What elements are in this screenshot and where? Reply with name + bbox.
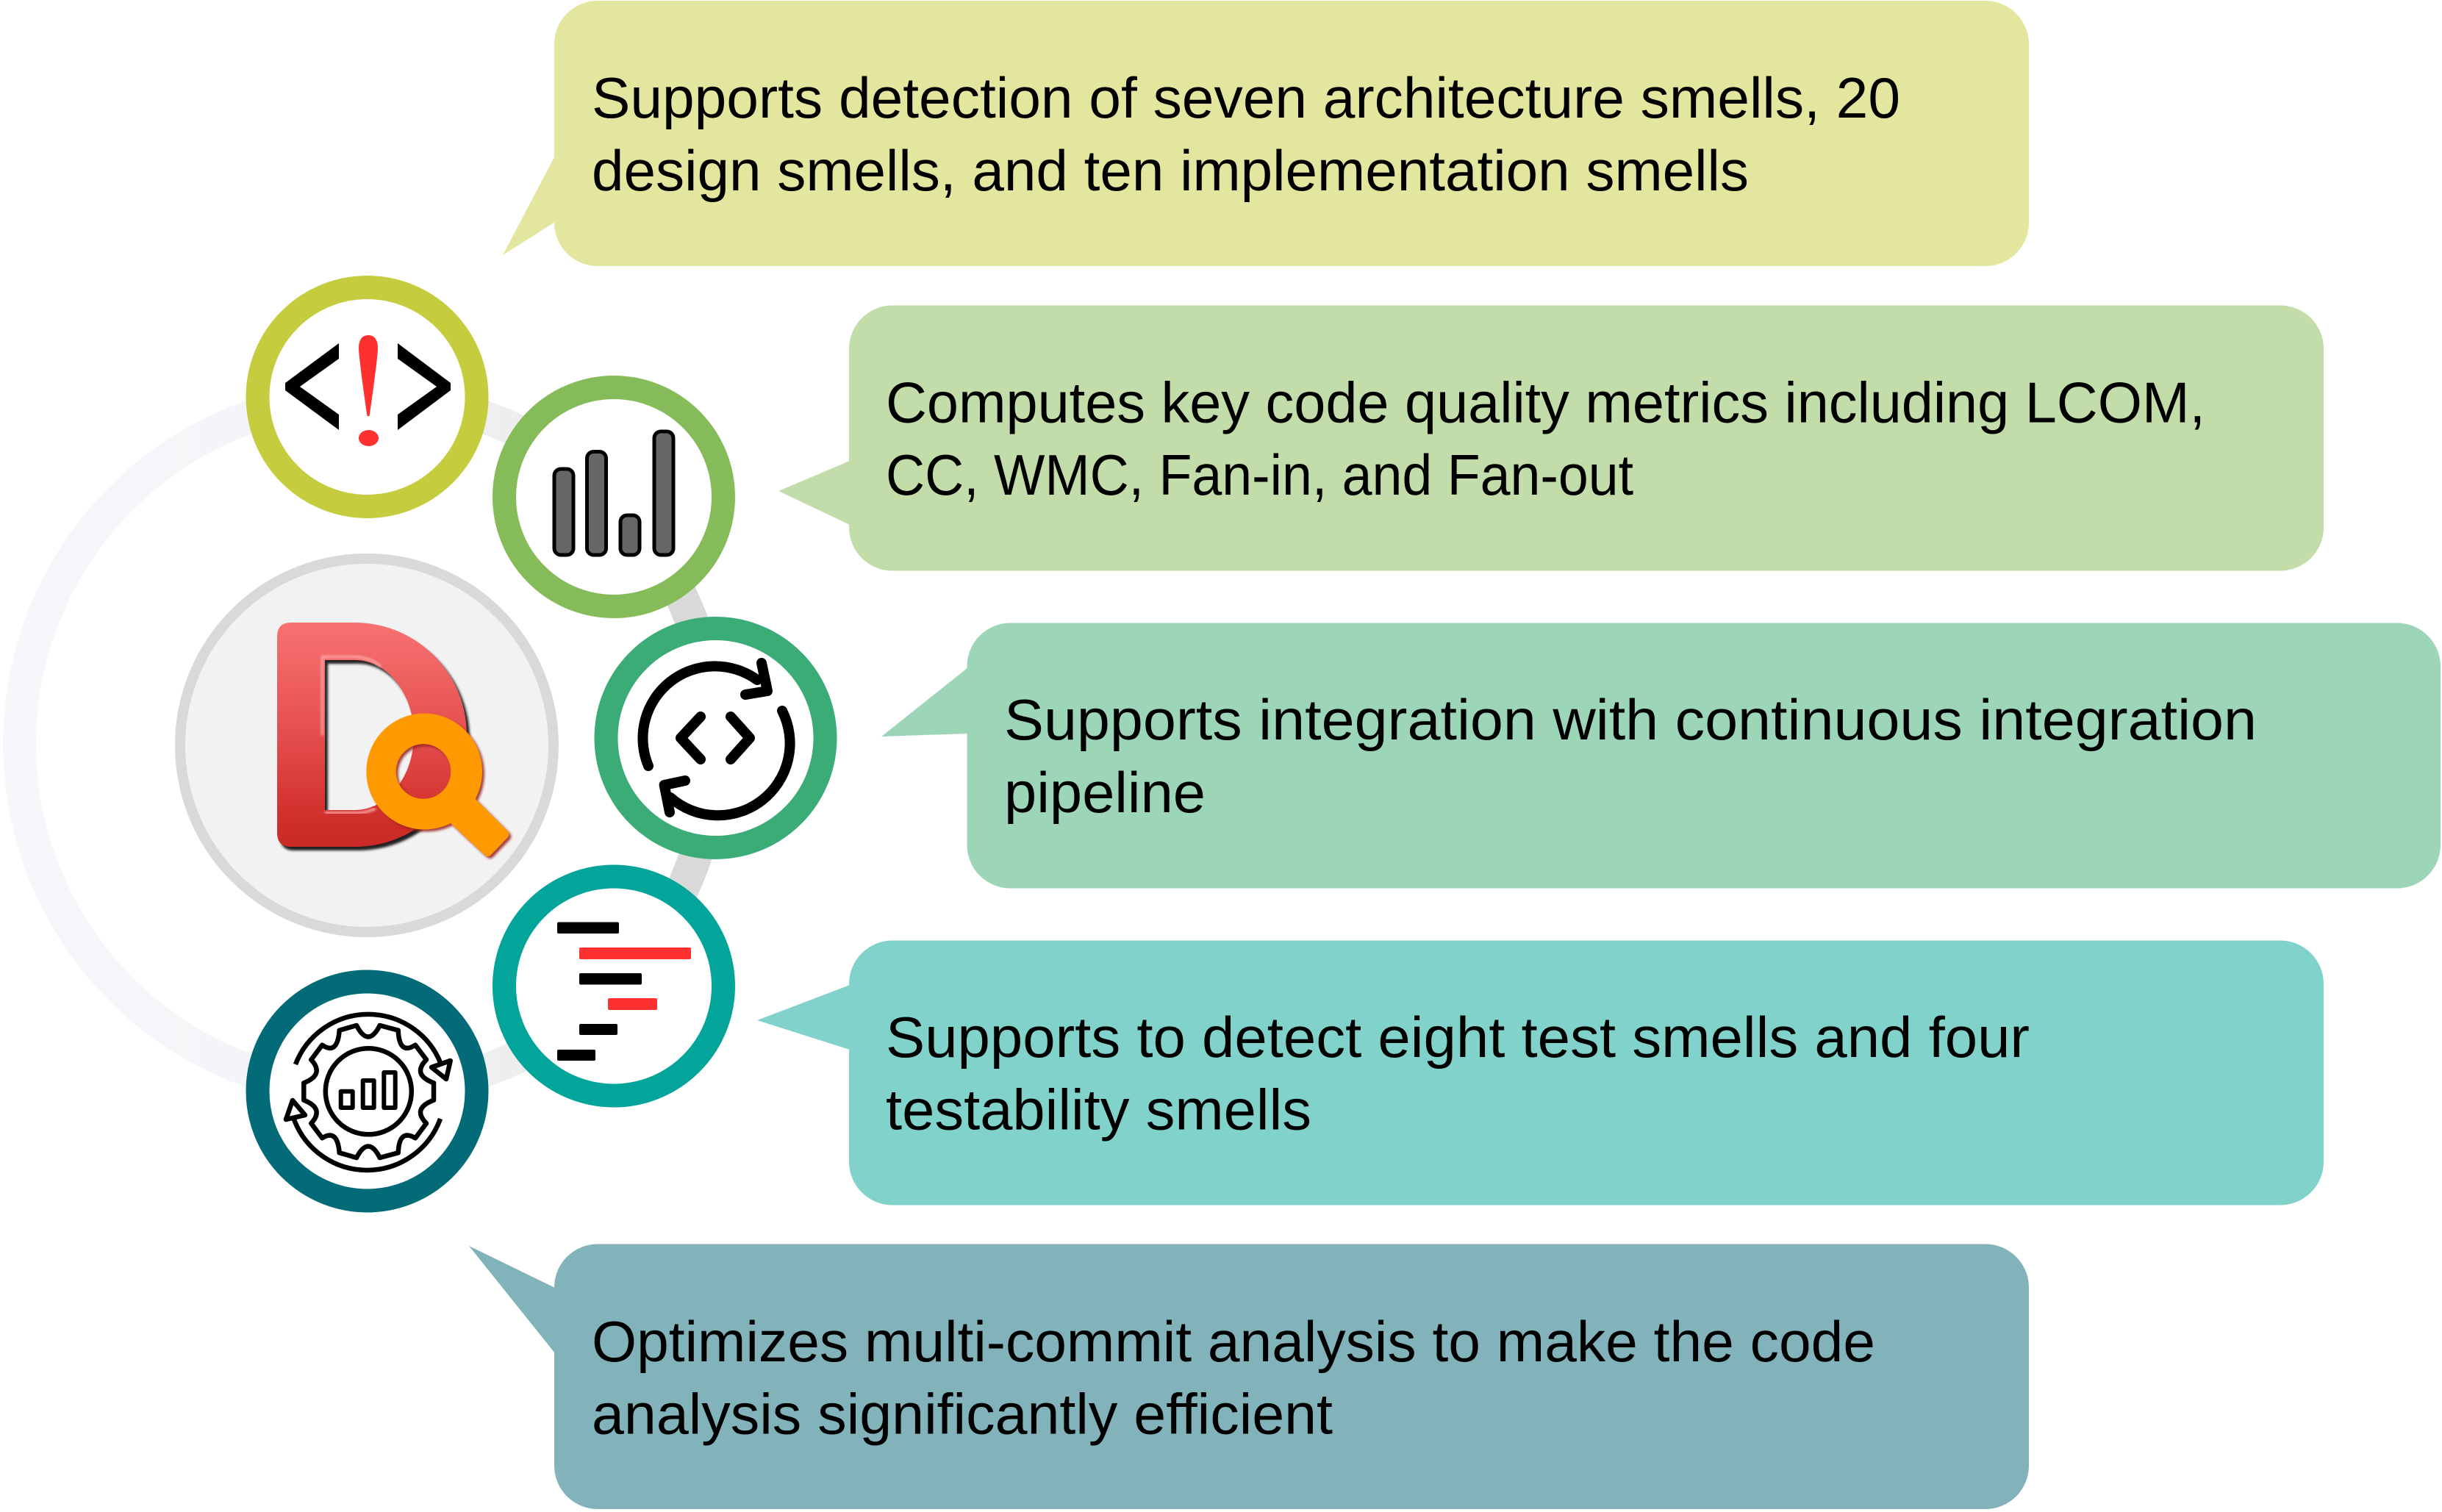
- callout 2 text: Computes key code quality metrics including LCOM,: [886, 370, 2205, 435]
- callout 4 text: Supports to detect eight test smells and four: [886, 1005, 2030, 1069]
- gantt bars: [557, 922, 691, 1061]
- callout 3: continuous integration: [881, 623, 2441, 888]
- left angle bracket: [285, 343, 339, 430]
- central logo badge: [180, 559, 554, 932]
- background orbit ring: [19, 397, 715, 1091]
- icon circle 3: continuous integration cycle: [606, 628, 825, 848]
- right angle bracket: [398, 343, 451, 430]
- callout 3 text: pipeline: [1004, 760, 1206, 825]
- callout 4: test smells: [757, 941, 2324, 1205]
- gear and circular arrows: [286, 1014, 451, 1170]
- icon circle 1: code warning: [257, 287, 476, 506]
- cycle arrows and code brackets: [642, 663, 790, 815]
- callout 5 text: [592, 1309, 1875, 1447]
- callout 4 text: testability smells: [886, 1078, 1311, 1142]
- bars: [554, 431, 673, 555]
- red exclamation mark: [359, 335, 379, 446]
- callout 1 text: [592, 65, 1900, 203]
- callout 3 text: Supports integration with continuous integration: [1004, 687, 2257, 752]
- callout 5: multi-commit analysis: [469, 1244, 2029, 1509]
- callout 2: code quality metrics: [778, 306, 2324, 570]
- callout 1 text: Supports detection of seven architecture smells, 20: [592, 65, 1900, 130]
- callout 5 text: Optimizes multi-commit analysis to make the code: [592, 1309, 1875, 1374]
- callout 5 text: analysis significantly efficient: [592, 1382, 1333, 1447]
- callout 3 text: [1004, 687, 2257, 825]
- callout 1: smells detection: [503, 1, 2029, 266]
- logo: letter D: [277, 623, 470, 850]
- callout 2 text: [886, 370, 2205, 507]
- callout 1 text: design smells, and ten implementation smells: [592, 138, 1749, 203]
- icon circle 2: bar chart: [504, 387, 723, 606]
- callout 4 text: [886, 1005, 2030, 1142]
- logo: magnifying glass: [366, 713, 512, 859]
- icon circle 4: test smells bars: [504, 876, 723, 1095]
- icon circle 5: gear with analysis chart: [257, 982, 476, 1201]
- callout 2 text: CC, WMC, Fan-in, and Fan-out: [886, 443, 1633, 507]
